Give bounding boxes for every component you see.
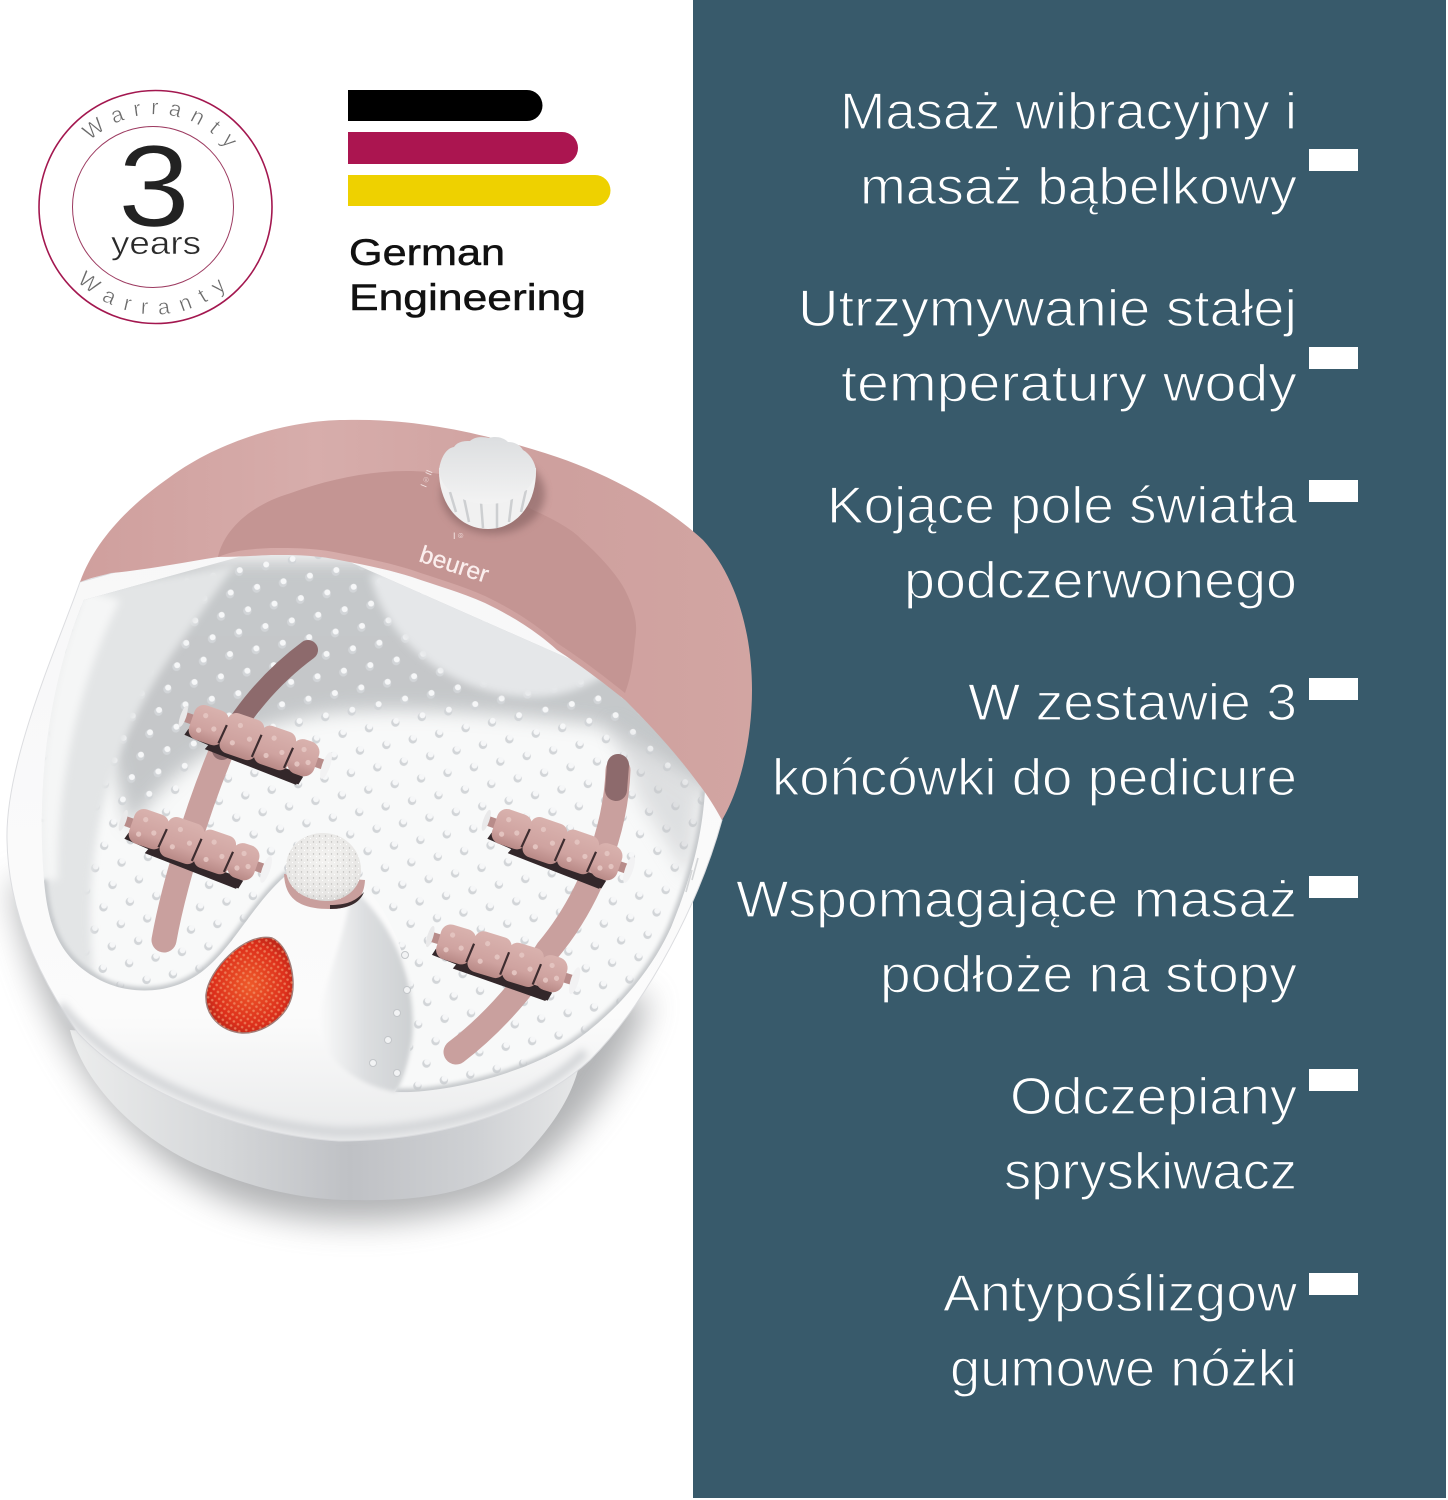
roller front right [419, 916, 585, 1009]
product: foot bath [0, 420, 760, 1222]
feature 4 [772, 674, 1358, 807]
left wall highlight [41, 590, 120, 880]
bowl interior [42, 555, 705, 1092]
holder shadow [330, 892, 364, 909]
feature 4: końcówki do pedicure [772, 749, 1297, 807]
left wall [41, 565, 235, 985]
dimples [66, 556, 702, 1090]
feature 7: Antypoślizgow [943, 1265, 1297, 1323]
roller back left [171, 696, 337, 793]
panel: blue feature background [693, 0, 1446, 1498]
dial top [439, 437, 536, 504]
beurer brand: beurer [416, 541, 492, 589]
right shade [616, 732, 699, 870]
roller front left [111, 800, 277, 897]
flag bar red [348, 132, 578, 164]
roller back right [474, 800, 640, 897]
feature 5: podłoże na stopy [880, 946, 1297, 1004]
feature 1: masaż bąbelkowy [860, 158, 1297, 216]
engineering label: Engineering [349, 277, 586, 318]
badge outer ring [39, 90, 272, 324]
base [70, 1030, 578, 1200]
feature 6 [1004, 1068, 1358, 1201]
dial shadow [441, 454, 545, 534]
slope dimples [370, 952, 410, 1076]
heel slope [318, 888, 413, 1092]
sprayer holder [284, 874, 365, 909]
heel rest bulge [369, 572, 600, 700]
badge bottom text: Warranty [80, 270, 224, 314]
dial side [439, 468, 536, 529]
badge top text: Warranty [81, 102, 236, 146]
feature 5: Wspomagające masaż [736, 871, 1297, 929]
lamp body [206, 937, 293, 1033]
rim shadow on floor [60, 560, 720, 830]
dial marks: I ⌾ II [419, 468, 435, 489]
pumice ball [286, 833, 361, 901]
sprayer [284, 833, 365, 909]
feature 3 [827, 477, 1358, 610]
feature 4: W zestawie 3 [968, 674, 1297, 732]
feature 3: Kojące pole światła [827, 477, 1297, 535]
pumice texture [286, 833, 361, 901]
drop shadow [12, 880, 650, 1222]
basin rim [7, 520, 722, 1141]
rim underside shading [60, 1005, 585, 1132]
right grip ridges [650, 858, 698, 945]
feature 2: temperatury wody [841, 355, 1297, 413]
feature 5 [736, 871, 1358, 1004]
feature 1 [840, 83, 1358, 216]
feature 2 [798, 280, 1358, 413]
badge years: years [111, 225, 201, 261]
dial marks: I ⌾ [453, 531, 464, 541]
left roller strip [164, 650, 308, 940]
lid raised panel [218, 471, 636, 693]
badge inner ring [72, 126, 234, 288]
feature 6: spryskiwacz [1004, 1143, 1297, 1201]
badge number: 3 [118, 121, 190, 251]
german engineering logo [348, 90, 610, 318]
feature 7: gumowe nóżki [950, 1340, 1297, 1398]
infrared lamp [206, 937, 293, 1033]
feature 1: Masaż wibracyjny i [840, 83, 1297, 141]
flag bar yellow [348, 175, 610, 206]
warranty badge [38, 90, 273, 324]
feature 6: Odczepiany [1010, 1068, 1297, 1126]
dial marks [419, 468, 464, 541]
dial [439, 437, 536, 529]
feature list [736, 83, 1358, 1398]
feature 7 [943, 1265, 1358, 1398]
lamp mesh [206, 937, 293, 1033]
flag bar black [348, 90, 542, 121]
german label: German [349, 232, 505, 273]
floor [649, 880, 686, 945]
dial grooves [450, 490, 526, 528]
bowl edge shading [44, 790, 705, 1092]
pink lid [80, 420, 752, 820]
right roller strip [456, 765, 618, 1052]
feature 2: Utrzymywanie stałej [798, 280, 1297, 338]
feature 3: podczerwonego [904, 552, 1297, 610]
